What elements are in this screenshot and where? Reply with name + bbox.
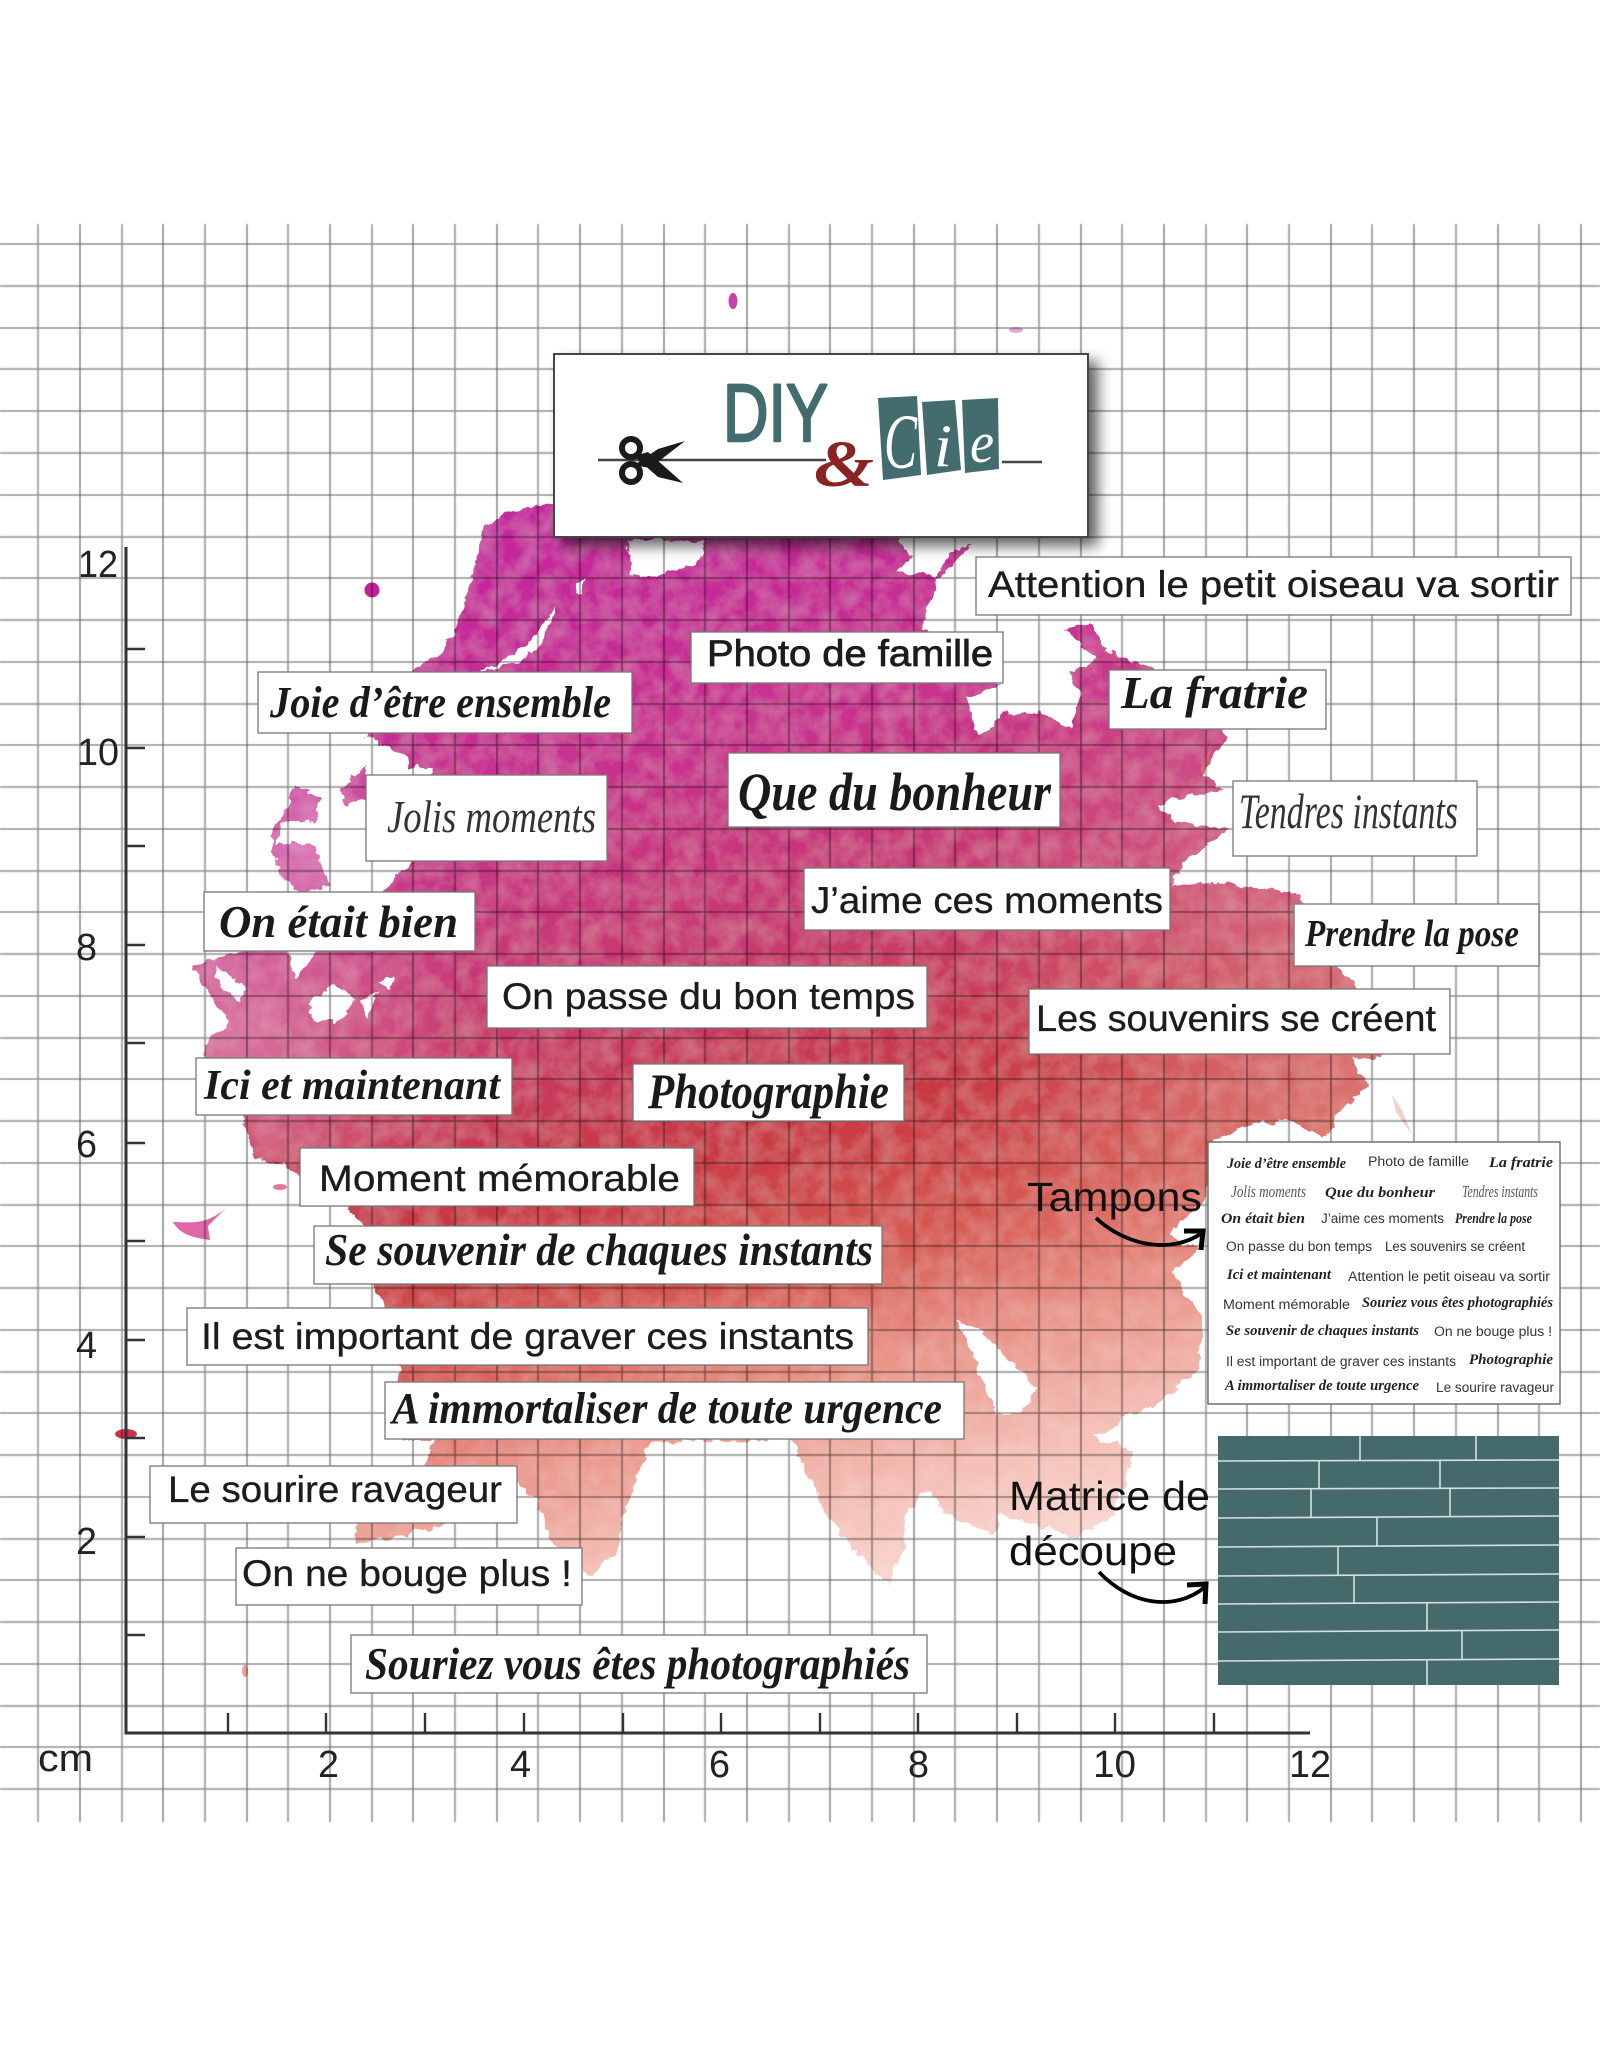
stamp sheet panel: On passe du bon temps — [1226, 1239, 1372, 1254]
label: On ne bouge plus !: On ne bouge plus ! — [242, 1553, 572, 1594]
logo word Cie: e — [970, 410, 994, 475]
label: Photo de famille: Photo de famille — [707, 633, 993, 674]
stamp sheet panel: A immortaliser de toute urgence — [1224, 1378, 1419, 1394]
stamp sheet panel: Il est important de graver ces instants — [1226, 1354, 1456, 1369]
stamp sheet panel: Prendre la pose — [1455, 1211, 1532, 1227]
label: Photographie: Photographie — [647, 1063, 889, 1119]
label: Il est important de graver ces instants: Il est important de graver ces instants — [201, 1316, 854, 1357]
label: Photo de famille — [691, 632, 1003, 683]
label: Souriez vous êtes photographiés: Souriez vous êtes photographiés — [365, 1638, 910, 1689]
label: J'aime ces moments: J’aime ces moments — [811, 880, 1163, 921]
centimetre axes: 2 — [318, 1744, 339, 1786]
label: Tendres instants: Tendres instants — [1239, 783, 1458, 839]
stamp sheet panel: On était bien — [1221, 1211, 1305, 1227]
stamp sheet panel: Souriez vous êtes photographiés — [1362, 1295, 1553, 1311]
logo word Cie — [878, 396, 999, 485]
label: Les souvenirs se créent: Les souvenirs se créent — [1036, 998, 1437, 1039]
label: Attention le petit oiseau va sortir: Attention le petit oiseau va sortir — [988, 564, 1559, 605]
label: On passe du bon temps — [487, 966, 927, 1028]
label: A immortaliser de toute urgence: A immortaliser de toute urgence — [389, 1384, 942, 1433]
centimetre axes: cm — [38, 1738, 93, 1780]
centimetre axes: 2 — [76, 1521, 97, 1563]
label: Tendres instants — [1233, 781, 1477, 856]
stamp sheet panel: Attention le petit oiseau va sortir — [1348, 1269, 1551, 1284]
heading: Tampons: Tampons — [1027, 1174, 1202, 1220]
label: Attention le petit oiseau va sortir — [976, 557, 1571, 615]
centimetre axes: 12 — [1289, 1744, 1331, 1786]
stamp sheet panel: Tendres instants — [1462, 1182, 1538, 1201]
label: Le sourire ravageur — [150, 1466, 517, 1523]
centimetre axes: 4 — [76, 1325, 97, 1367]
label: Les souvenirs se créent — [1029, 989, 1450, 1054]
label: Moment mémorable: Moment mémorable — [319, 1158, 680, 1199]
label: On était bien: On était bien — [219, 896, 458, 947]
centimetre axes — [38, 544, 1331, 1786]
label: J'aime ces moments — [804, 868, 1170, 930]
stamp sheet panel: Joie d’être ensemble — [1226, 1156, 1346, 1172]
label: Jolis moments — [366, 775, 607, 861]
centimetre axes: 8 — [76, 927, 97, 969]
label: La fratrie: La fratrie — [1120, 667, 1308, 718]
stamp sheet panel: Photo de famille — [1368, 1154, 1469, 1169]
label: Ici et maintenant: Ici et maintenant — [203, 1063, 501, 1109]
stamp sheet panel: Moment mémorable — [1223, 1297, 1350, 1312]
centimetre axes: 4 — [510, 1744, 531, 1786]
stamp sheet panel: Photographie — [1469, 1352, 1553, 1368]
arrow to stamp sheet — [1096, 1218, 1203, 1250]
watercolor ink splash — [115, 293, 1412, 1677]
label: Il est important de graver ces instants — [187, 1308, 868, 1365]
stamp sheet panel: Ici et maintenant — [1226, 1267, 1332, 1283]
heading: Matrice de découpe: Matrice de — [1009, 1473, 1210, 1519]
centimetre axes: 12 — [78, 544, 118, 586]
label: Prendre la pose: Prendre la pose — [1304, 913, 1519, 955]
logo word DIY: DIY — [723, 368, 828, 459]
label: Se souvenir de chaques instants: Se souvenir de chaques instants — [325, 1224, 873, 1275]
label: On passe du bon temps: On passe du bon temps — [502, 976, 915, 1017]
arrow to cutting die — [1099, 1572, 1206, 1604]
centimetre axes: 10 — [1093, 1744, 1136, 1786]
icon: scissors — [622, 439, 685, 483]
stamp sheet panel: La fratrie — [1488, 1155, 1553, 1171]
label: Jolis moments: Jolis moments — [387, 791, 596, 842]
cutting die panel — [1218, 1436, 1559, 1685]
infographic canvas — [0, 223, 1600, 1823]
centimetre axes: 6 — [709, 1744, 730, 1786]
stamp sheet panel: Le sourire ravageur — [1436, 1380, 1554, 1395]
label: Le sourire ravageur: Le sourire ravageur — [168, 1469, 502, 1510]
logo card — [554, 354, 1088, 537]
stamp sheet panel: Les souvenirs se créent — [1385, 1239, 1525, 1254]
centimetre axes: 8 — [908, 1744, 929, 1786]
label: Moment mémorable — [300, 1148, 694, 1206]
logo word Cie: C — [884, 398, 918, 485]
label: Que du bonheur: Que du bonheur — [738, 762, 1052, 822]
centimetre axes: 6 — [76, 1124, 97, 1166]
label: On ne bouge plus ! — [236, 1548, 582, 1605]
stamp sheet panel: On ne bouge plus ! — [1434, 1324, 1552, 1339]
measuring grid — [0, 224, 1600, 1822]
centimetre axes: 10 — [77, 732, 119, 774]
logo word Cie: i — [934, 413, 952, 479]
stamp sheet panel: Jolis moments — [1231, 1182, 1306, 1201]
heading: Matrice de découpe: découpe — [1009, 1528, 1177, 1574]
label: La fratrie — [1109, 667, 1326, 729]
label: Joie d'être ensemble: Joie d’être ensemble — [269, 678, 611, 727]
stamp sheet panel: Que du bonheur — [1325, 1185, 1435, 1201]
label: Prendre la pose — [1294, 904, 1539, 966]
stamp sheet panel: J’aime ces moments — [1321, 1211, 1444, 1226]
logo ampersand: & — [814, 428, 874, 501]
stamp sheet panel — [1208, 1142, 1560, 1404]
heading: Matrice de découpe — [1009, 1473, 1210, 1574]
stamp sheet panel: Se souvenir de chaques instants — [1226, 1323, 1419, 1339]
